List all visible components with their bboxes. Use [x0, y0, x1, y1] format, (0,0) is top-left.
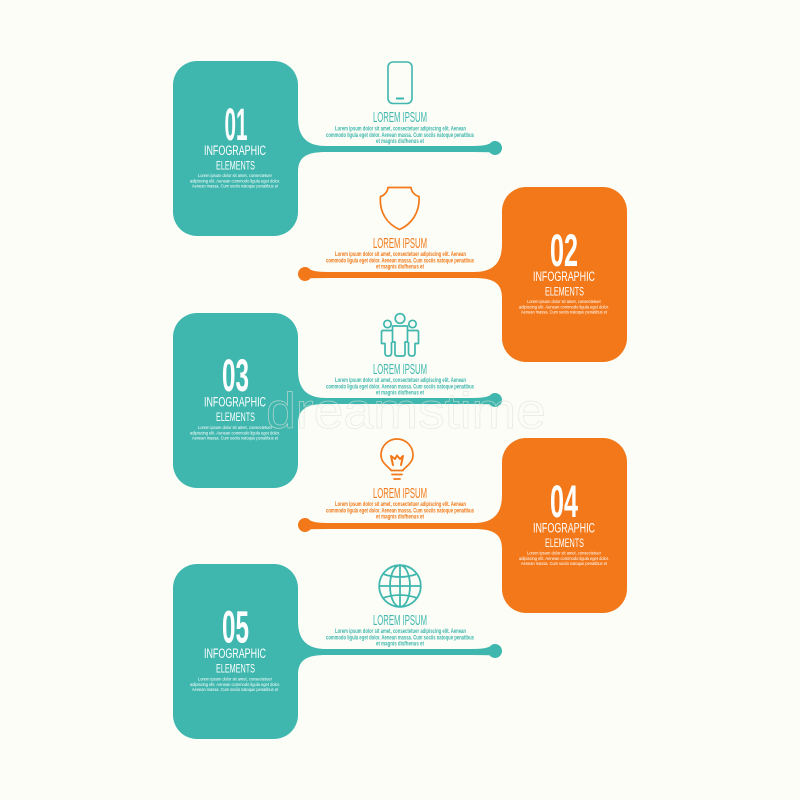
card text: 05: INFOGRAPHIC	[204, 646, 266, 661]
heading and body: 01: et magnis disfhenus et	[376, 139, 424, 145]
card with connector: 05	[173, 564, 502, 739]
card text: 05	[190, 602, 280, 692]
card text: 02: Lorem ipsum dolor sit amet, consectetuer	[527, 299, 601, 304]
heading and body: 05: et magnis disfhenus et	[376, 642, 424, 648]
heading and body: 04	[326, 486, 474, 520]
card text: 01: ELEMENTS	[216, 160, 255, 172]
card text: 02: Aenean massa. Cum sociis natoque penatibus et	[521, 310, 608, 314]
card text: 02	[519, 225, 609, 314]
heading and body: 02: LOREM IPSUM	[373, 236, 427, 252]
card text: 04: INFOGRAPHIC	[533, 520, 595, 536]
card with connector: 02	[298, 187, 627, 362]
heading and body: 01: Lorem ipsum dolor sit amet, consectetuer adipiscing elit. Aenean	[335, 126, 466, 132]
card with connector: 03	[173, 313, 502, 488]
card text: 01: INFOGRAPHIC	[204, 143, 266, 158]
card text: 01: 01	[224, 99, 248, 150]
card text: 04: Lorem ipsum dolor sit amet, consectetuer	[527, 550, 601, 556]
heading and body: 04: Lorem ipsum dolor sit amet, consectetuer adipiscing elit. Aenean	[335, 502, 466, 508]
panel: step 01	[173, 61, 502, 236]
card text: 02: INFOGRAPHIC	[533, 269, 595, 284]
heading and body: 03: et magnis disfhenus et	[376, 390, 424, 396]
heading and body: 05: LOREM IPSUM	[373, 613, 427, 629]
card text: 04: Aenean massa. Cum sociis natoque penatibus et	[521, 561, 608, 566]
icon: smartphone	[388, 62, 412, 104]
card text: 02: ELEMENTS	[545, 286, 584, 298]
heading and body: 04: et magnis disfhenus et	[376, 514, 424, 520]
card text: 05: Aenean massa. Cum sociis natoque penatibus et	[192, 687, 279, 692]
panel: step 02	[298, 187, 627, 362]
card text: 05: Lorem ipsum dolor sit amet, consectetuer	[198, 676, 272, 682]
icon: light bulb	[381, 439, 413, 479]
card text: 01: Lorem ipsum dolor sit amet, consectetuer	[198, 173, 272, 178]
heading and body: 03: commodo ligula eget dolor. Aenean massa. Cum sociis natoque penatibus	[326, 384, 474, 390]
card text: 03: Lorem ipsum dolor sit amet, consectetuer	[198, 425, 272, 430]
card text: 03: INFOGRAPHIC	[204, 394, 266, 410]
card text: 02: adipiscing elit. Aenean commodo ligula eget dolor.	[519, 304, 609, 309]
icon: globe	[379, 565, 421, 607]
card text: 05: adipiscing elit. Aenean commodo ligula eget dolor.	[190, 682, 280, 687]
card with connector: 04	[298, 438, 627, 613]
heading and body: 04: LOREM IPSUM	[373, 486, 427, 502]
card text: 04: 04	[550, 476, 578, 527]
heading and body: 03	[326, 362, 474, 396]
card text: 03: 03	[222, 350, 249, 401]
card text: 01: adipiscing elit. Aenean commodo ligula eget dolor.	[190, 178, 280, 183]
card text: 04: ELEMENTS	[545, 538, 584, 550]
heading and body: 03: Lorem ipsum dolor sit amet, consectetuer adipiscing elit. Aenean	[335, 378, 466, 384]
card text: 03: ELEMENTS	[216, 412, 255, 424]
heading and body: 01: commodo ligula eget dolor. Aenean massa. Cum sociis natoque penatibus	[326, 133, 474, 139]
heading and body: 02: commodo ligula eget dolor. Aenean massa. Cum sociis natoque penatibus	[326, 258, 474, 264]
card text: 03: adipiscing elit. Aenean commodo ligula eget dolor.	[190, 430, 280, 435]
panel: step 05	[173, 564, 502, 739]
card with connector: 01	[173, 61, 502, 236]
card text: 04	[519, 476, 609, 566]
icon: people	[382, 314, 418, 356]
heading and body: 02: Lorem ipsum dolor sit amet, consectetuer adipiscing elit. Aenean	[335, 252, 466, 258]
heading and body: 02	[326, 236, 474, 270]
card text: 05: 05	[222, 602, 249, 652]
card text: 01: Aenean massa. Cum sociis natoque penatibus et	[192, 184, 279, 188]
heading and body: 02: et magnis disfhenus et	[376, 264, 424, 270]
card text: 05: ELEMENTS	[216, 664, 255, 676]
heading and body: 05	[326, 613, 474, 648]
card text: 03	[190, 350, 280, 440]
icon: shield	[380, 188, 419, 230]
heading and body: 01: LOREM IPSUM	[373, 110, 427, 126]
card text: 04: adipiscing elit. Aenean commodo ligula eget dolor.	[519, 556, 609, 561]
heading and body: 01	[326, 110, 474, 145]
heading and body: 05: Lorem ipsum dolor sit amet, consectetuer adipiscing elit. Aenean	[335, 629, 466, 635]
watermark: dreamstime	[266, 383, 546, 439]
panel: step 03	[173, 313, 502, 488]
card text: 02: 02	[550, 225, 578, 276]
heading and body: 05: commodo ligula eget dolor. Aenean massa. Cum sociis natoque penatibus	[326, 635, 474, 641]
panel: step 04	[298, 438, 627, 613]
heading and body: 04: commodo ligula eget dolor. Aenean massa. Cum sociis natoque penatibus	[326, 508, 474, 514]
card text: 01	[190, 99, 280, 188]
heading and body: 03: LOREM IPSUM	[373, 362, 427, 378]
card text: 03: Aenean massa. Cum sociis natoque penatibus et	[192, 436, 279, 440]
